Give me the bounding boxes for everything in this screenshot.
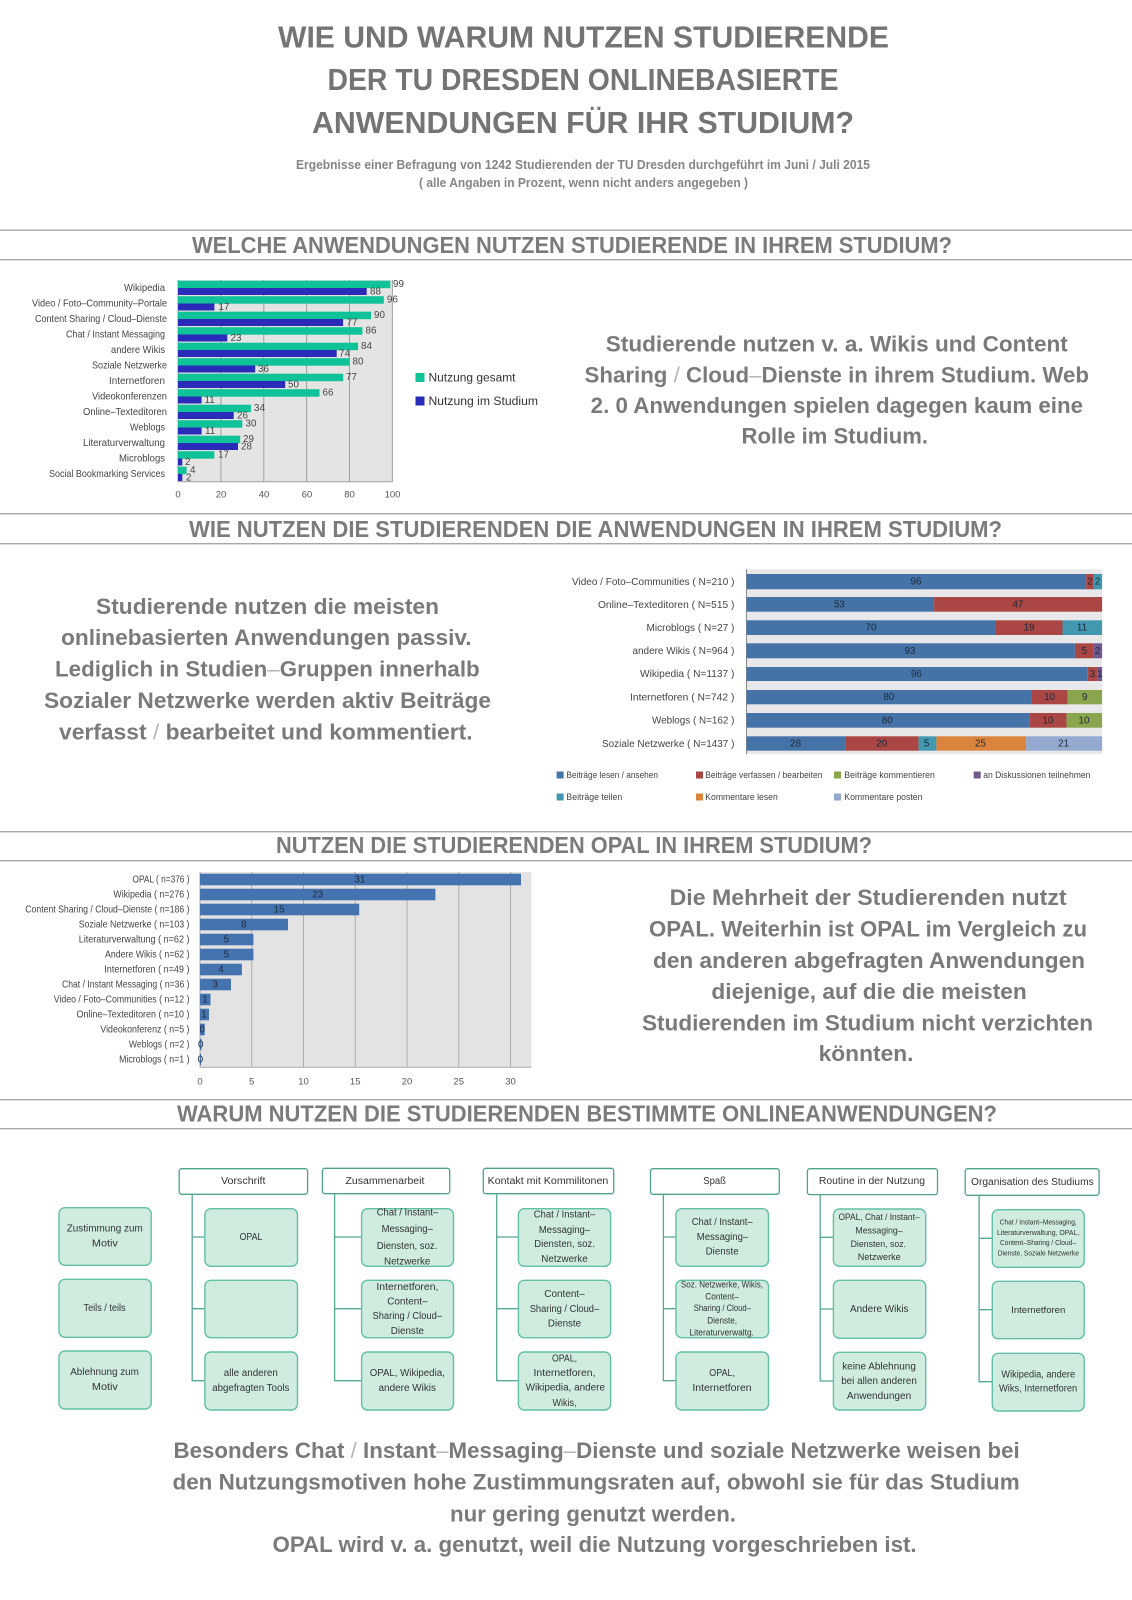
category labels: Online–Texteditoren ( N=515 ) <box>598 600 734 611</box>
bar: Soziale Netzwerke: 21 <box>1058 738 1069 750</box>
category labels: OPAL ( n=376 ) <box>132 874 190 885</box>
x axis labels: 60 <box>302 490 312 500</box>
bar: Wikipedia <box>746 667 1103 681</box>
x axis labels: 5 <box>249 1076 254 1087</box>
column: Spaß: OPAL, <box>709 1368 735 1379</box>
column: Kontakt mit Kommilitonen: Sharing / Cloud– <box>530 1304 600 1315</box>
data labels: Nutzung im Studium: 28 <box>241 442 252 452</box>
column: Routine in der Nutzung: Messaging– <box>855 1226 903 1237</box>
column: Organisation des Studiums: Dienste, Soziale Netzwerke <box>998 1248 1079 1258</box>
data labels: Nutzung gesamt: 66 <box>322 388 334 398</box>
text block: Fazit Nutzungsmotive: nur gering genutzt werden. <box>450 1501 736 1526</box>
data labels: Nutzung im Studium: 2 <box>186 472 191 484</box>
data labels: 1 <box>201 1010 207 1020</box>
category labels: Online–Texteditoren <box>83 407 167 418</box>
data labels: Nutzung gesamt: 84 <box>361 341 372 352</box>
column: Spaß: Spaß <box>703 1176 726 1187</box>
data labels: Nutzung im Studium: 2 <box>185 457 190 468</box>
bar: Internetforen: 80 <box>883 692 895 703</box>
category labels: Video / Foto–Communities ( N=210 ) <box>572 577 734 588</box>
data labels: 1 <box>202 994 208 1006</box>
row labels: Teils / teils <box>84 1303 126 1314</box>
data labels: Nutzung im Studium: 77 <box>346 318 357 328</box>
column: Kontakt mit Kommilitonen: Content– <box>544 1289 585 1300</box>
legend: Kommentare posten <box>844 792 922 802</box>
bar: Video/Foto-Communities: 2 <box>1087 577 1093 588</box>
data labels: Nutzung im Studium: 88 <box>370 286 381 298</box>
data labels: Nutzung gesamt: 29 <box>243 434 254 445</box>
bar: andere Wikis: 2 <box>1095 646 1100 657</box>
bar: Weblogs: 80 <box>882 715 893 726</box>
category labels: Wikipedia <box>124 283 165 294</box>
bar: andere Wikis: 5 <box>1082 646 1088 657</box>
bar: Weblogs: 10 <box>1079 715 1090 726</box>
bar: Soziale Netzwerke: 25 <box>975 738 986 750</box>
data labels: 0 <box>198 1054 204 1066</box>
column: Zusammenarbeit <box>322 1168 454 1410</box>
bar: andere Wikis <box>746 643 1102 658</box>
data labels: Nutzung im Studium: 17 <box>218 302 229 313</box>
text block: Fazit Nutzungsmotive: Besonders Chat / Instant–Messaging–Dienste und soziale Netzwerke weisen bei <box>174 1438 1020 1463</box>
column: Routine in der Nutzung: Anwendungen <box>847 1391 911 1402</box>
text block: Wikis und Content Sharing <box>584 332 1089 449</box>
column: Zusammenarbeit: Messaging– <box>382 1224 433 1235</box>
data labels: 5 <box>224 950 230 960</box>
column: Spaß: Messaging– <box>697 1232 749 1243</box>
category labels: Videokonferenzen <box>92 391 167 402</box>
data labels: Nutzung gesamt <box>190 279 404 476</box>
bar: Microblogs: 70 <box>866 623 877 634</box>
row labels: Motiv <box>92 1238 118 1250</box>
column: Zusammenarbeit: Diensten, soz. <box>377 1241 437 1252</box>
column: Kontakt mit Kommilitonen: Chat / Instant– <box>534 1210 596 1220</box>
data labels: Nutzung im Studium: 11 <box>204 395 215 406</box>
column: Vorschrift: Vorschrift <box>221 1176 266 1187</box>
category labels <box>572 577 734 750</box>
data labels: Nutzung gesamt: 99 <box>393 279 404 290</box>
text block: Mehrheit nutzt OPAL: Die Mehrheit der Studierenden nutzt <box>670 885 1067 910</box>
x axis labels <box>197 1076 516 1087</box>
bar: Internetforen: 9 <box>1082 692 1087 703</box>
column: Organisation des Studiums: Wikipedia, andere <box>1001 1370 1076 1380</box>
column: Organisation des Studiums: Chat / Instant–Messaging, <box>1000 1218 1077 1226</box>
text block: passive Nutzung: Studierende nutzen die meisten <box>96 594 439 619</box>
x axis labels: 80 <box>344 490 355 500</box>
bar: Video/Foto-Communities <box>746 574 1102 589</box>
data labels: Nutzung im Studium: 26 <box>237 410 248 422</box>
bar: Internetforen <box>746 690 1102 704</box>
column: Organisation des Studiums: Literaturverwaltung, OPAL, <box>997 1228 1079 1237</box>
text block: Wikis und Content Sharing: Studierende nutzen v. a. Wikis und Content <box>606 332 1068 357</box>
column: Vorschrift: alle anderen <box>224 1368 278 1379</box>
column: Kontakt mit Kommilitonen <box>483 1168 614 1410</box>
column: Kontakt mit Kommilitonen: OPAL, <box>552 1354 577 1364</box>
column: Spaß: Literaturverwaltg. <box>689 1328 754 1338</box>
data labels: 31 <box>355 874 365 886</box>
column: Routine in der Nutzung: Netzwerke <box>858 1252 901 1263</box>
legend <box>416 372 538 408</box>
column: Routine in der Nutzung: keine Ablehnung <box>842 1362 916 1372</box>
column: Organisation des Studiums: Content–Sharing / Cloud– <box>1000 1238 1076 1247</box>
column: Spaß: Dienste, <box>707 1315 737 1325</box>
column: Vorschrift: OPAL <box>240 1232 263 1243</box>
column: Zusammenarbeit: Internetforen, <box>376 1282 438 1293</box>
category labels: Microblogs ( N=27 ) <box>646 623 734 634</box>
column: Routine in der Nutzung: bei allen anderen <box>841 1376 917 1387</box>
category labels: Microblogs ( n=1 ) <box>119 1054 190 1065</box>
data labels: Nutzung im Studium: 74 <box>339 348 350 360</box>
category labels: Literaturverwaltung ( n=62 ) <box>79 934 190 945</box>
column: Kontakt mit Kommilitonen: Netzwerke <box>541 1254 588 1265</box>
column: Spaß: Dienste <box>706 1246 739 1258</box>
heading: section 2: WIE NUTZEN DIE STUDIERENDEN DIE ANWENDUNGEN IN IHREM STUDIUM? <box>189 516 1002 542</box>
heading: section 3: NUTZEN DIE STUDIERENDEN OPAL IN IHREM STUDIUM? <box>276 832 872 858</box>
title <box>278 19 889 140</box>
category labels: Content Sharing / Cloud–Dienste <box>35 314 167 325</box>
category labels: Weblogs ( N=162 ) <box>652 716 734 726</box>
data labels: Nutzung gesamt: 80 <box>352 356 364 368</box>
bar: Soziale Netzwerke: 20 <box>876 738 888 750</box>
column: Spaß: Sharing / Cloud– <box>694 1303 751 1313</box>
category labels: Microblogs <box>119 453 165 464</box>
data labels: Nutzung im Studium: 36 <box>258 364 269 375</box>
column: Organisation des Studiums <box>965 1169 1099 1411</box>
title: ANWENDUNGEN FÜR IHR STUDIUM? <box>312 105 854 140</box>
category labels <box>32 283 167 480</box>
column: Zusammenarbeit: Content– <box>387 1296 428 1308</box>
x axis labels: 30 <box>505 1076 516 1087</box>
column: Spaß <box>650 1169 779 1410</box>
text block: Mehrheit nutzt OPAL: den anderen abgefragten Anwendungen <box>653 948 1085 973</box>
bar: andere Wikis: 93 <box>905 646 916 657</box>
category labels: Social Bookmarking Services <box>49 469 165 480</box>
column: Routine in der Nutzung: Routine in der Nutzung <box>819 1176 925 1187</box>
bar: Internetforen: 10 <box>1044 692 1056 703</box>
text block: Wikis und Content Sharing: 2. 0 Anwendungen spielen dagegen kaum eine <box>591 393 1083 418</box>
legend: Beiträge verfassen / bearbeiten <box>705 770 822 780</box>
x axis labels: 100 <box>385 490 400 500</box>
category labels: Chat / Instant Messaging <box>66 329 165 340</box>
category labels: Wikipedia ( n=276 ) <box>113 889 190 900</box>
column: Kontakt mit Kommilitonen: Kontakt mit Kommilitonen <box>488 1176 608 1187</box>
bar: Video/Foto-Communities: 2 <box>1095 577 1100 588</box>
x axis labels: 20 <box>402 1076 412 1087</box>
column: Zusammenarbeit: Chat / Instant– <box>377 1208 439 1218</box>
bar: Microblogs: 11 <box>1077 623 1087 634</box>
text block: Mehrheit nutzt OPAL: könnten. <box>819 1041 914 1066</box>
data labels: Nutzung gesamt: 34 <box>254 403 265 414</box>
x axis labels: 20 <box>216 490 226 500</box>
data labels: Nutzung gesamt: 77 <box>346 372 357 383</box>
category labels: Internetforen ( N=742 ) <box>630 692 734 704</box>
legend: Kommentare lesen <box>705 792 778 802</box>
column: Kontakt mit Kommilitonen: Messaging– <box>539 1225 591 1236</box>
legend: Beiträge kommentieren <box>844 770 935 780</box>
subtitle <box>296 158 870 190</box>
legend <box>557 770 1090 802</box>
column: Zusammenarbeit: Dienste <box>391 1326 424 1337</box>
title: WIE UND WARUM NUTZEN STUDIERENDE <box>278 19 889 54</box>
data labels: 15 <box>274 904 285 916</box>
subtitle: ( alle Angaben in Prozent, wenn nicht anders angegeben ) <box>419 176 748 190</box>
column: Kontakt mit Kommilitonen: Wikipedia, andere <box>526 1382 605 1394</box>
column: Routine in der Nutzung: OPAL, Chat / Instant– <box>838 1212 920 1223</box>
column: Zusammenarbeit: Netzwerke <box>384 1256 431 1268</box>
bar: Microblogs: 19 <box>1024 623 1034 634</box>
data labels: Nutzung gesamt: 90 <box>374 310 385 321</box>
data labels: Nutzung im Studium: 23 <box>230 333 242 344</box>
data labels: 0 <box>199 1024 205 1036</box>
category labels: Wikipedia ( N=1137 ) <box>640 669 734 680</box>
legend: Beiträge lesen / ansehen <box>566 770 658 780</box>
text block: Wikis und Content Sharing: Sharing / Cloud–Dienste in ihrem Studium. Web <box>584 362 1089 387</box>
text block: Fazit Nutzungsmotive: den Nutzungsmotiven hohe Zustimmungsraten auf, obwohl sie für das Studium <box>172 1470 1020 1495</box>
column: Organisation des Studiums: Internetforen <box>1011 1305 1065 1316</box>
column: Organisation des Studiums: Organisation des Studiums <box>971 1177 1094 1188</box>
column: Spaß: Chat / Instant– <box>692 1217 753 1228</box>
column: Spaß: Content– <box>705 1291 739 1301</box>
x axis labels: 10 <box>298 1076 309 1087</box>
bar chart: Nutzung gesamt und im Studium <box>32 279 538 500</box>
bar: Soziale Netzwerke: 28 <box>790 738 802 750</box>
row labels <box>59 1208 151 1409</box>
text block: Mehrheit nutzt OPAL <box>642 885 1093 1066</box>
bar: Wikipedia: 3 <box>1090 669 1096 680</box>
legend: Beiträge teilen <box>566 792 622 802</box>
data labels: Nutzung im Studium: 11 <box>205 426 215 437</box>
category labels: Video / Foto–Community–Portale <box>32 298 167 309</box>
data labels: Nutzung gesamt: 86 <box>366 326 377 336</box>
bar: Weblogs <box>746 713 1102 728</box>
bar: Microblogs <box>746 620 1102 635</box>
data labels: Nutzung im Studium: 50 <box>288 380 299 390</box>
data labels: 8 <box>241 920 247 930</box>
category labels: Internetforen ( n=49 ) <box>104 964 190 975</box>
column: Zusammenarbeit: Zusammenarbeit <box>346 1176 425 1187</box>
x axis labels <box>175 490 400 500</box>
column: Spaß: Internetforen <box>692 1383 752 1394</box>
column: Organisation des Studiums: Wiks, Internetforen <box>999 1384 1077 1394</box>
column: Kontakt mit Kommilitonen: Internetforen, <box>534 1368 596 1379</box>
column: Spaß: Soz. Netzwerke, Wikis, <box>681 1279 763 1289</box>
column: Routine in der Nutzung: Andere Wikis <box>850 1304 908 1315</box>
column: Vorschrift <box>179 1169 308 1410</box>
category labels: Andere Wikis ( n=62 ) <box>105 949 190 960</box>
column: Kontakt mit Kommilitonen: Wikis, <box>552 1398 576 1409</box>
category labels: andere Wikis ( N=964 ) <box>632 646 734 657</box>
data labels: 23 <box>312 890 324 900</box>
bar: Online-Texteditoren <box>746 597 1102 612</box>
heading: section 1: WELCHE ANWENDUNGEN NUTZEN STUDIERENDE IN IHREM STUDIUM? <box>192 232 952 258</box>
title: DER TU DRESDEN ONLINEBASIERTE <box>328 62 838 97</box>
column: Zusammenarbeit: andere Wikis <box>378 1383 436 1394</box>
column: Routine in der Nutzung: Diensten, soz. <box>851 1239 906 1250</box>
x axis labels: 40 <box>259 490 269 500</box>
data labels: Nutzung gesamt: 4 <box>190 465 196 476</box>
category labels <box>25 874 189 1065</box>
stacked bar chart: Art der Nutzung <box>557 569 1103 802</box>
data labels: 3 <box>212 980 218 990</box>
bar: Online-Texteditoren: 47 <box>1012 599 1023 610</box>
x axis labels: 0 <box>175 490 181 500</box>
legend: Nutzung gesamt <box>428 372 516 384</box>
bar: Video/Foto-Communities: 96 <box>911 577 922 588</box>
column: Zusammenarbeit: OPAL, Wikipedia, <box>370 1368 445 1379</box>
subtitle: Ergebnisse einer Befragung von 1242 Studierenden der TU Dresden durchgeführt im Juni / Juli 2015 <box>296 158 870 172</box>
category labels: Online–Texteditoren ( n=10 ) <box>76 1009 190 1020</box>
category labels: Soziale Netzwerke ( n=103 ) <box>79 919 190 930</box>
category labels: andere Wikis <box>111 345 165 356</box>
category labels: Content Sharing / Cloud–Dienste ( n=186 ) <box>25 904 189 915</box>
x axis labels: 15 <box>350 1076 360 1087</box>
bar: Soziale Netzwerke <box>746 736 1102 751</box>
bar: Online-Texteditoren: 53 <box>834 599 845 610</box>
text block: Fazit Nutzungsmotive <box>172 1438 1020 1557</box>
x axis labels: 0 <box>197 1076 203 1087</box>
data labels: Nutzung gesamt: 30 <box>246 418 257 430</box>
category labels: Literaturverwaltung <box>83 438 165 449</box>
diagram: Nutzungsmotive <box>59 1168 1099 1411</box>
category labels: Internetforen <box>109 376 165 387</box>
column: Routine in der Nutzung <box>807 1169 938 1410</box>
row labels: Ablehnung zum <box>70 1367 139 1378</box>
data labels: Nutzung gesamt: 96 <box>387 294 398 306</box>
column: Kontakt mit Kommilitonen: Dienste <box>548 1318 582 1330</box>
category labels: Soziale Netzwerke ( N=1437 ) <box>602 739 734 750</box>
x axis labels: 25 <box>453 1076 464 1087</box>
text block: passive Nutzung: verfasst / bearbeitet und kommentiert. <box>59 720 473 744</box>
legend: Nutzung im Studium <box>428 396 538 408</box>
bar: Wikipedia: 96 <box>911 669 922 680</box>
category labels: Chat / Instant Messaging ( n=36 ) <box>62 979 190 990</box>
column: Vorschrift: abgefragten Tools <box>212 1383 289 1394</box>
row labels: Motiv <box>92 1382 118 1393</box>
data labels: 4 <box>218 964 224 976</box>
category labels: Weblogs ( n=2 ) <box>129 1039 190 1050</box>
column: Zusammenarbeit: Sharing / Cloud– <box>372 1311 442 1322</box>
category labels: Videokonferenz ( n=5 ) <box>100 1024 190 1035</box>
data labels <box>198 874 365 1066</box>
category labels: Weblogs <box>130 422 165 433</box>
bar chart: OPAL <box>25 872 531 1087</box>
data labels: Nutzung im Studium <box>185 286 381 484</box>
text block: Fazit Nutzungsmotive: OPAL wird v. a. genutzt, weil die Nutzung vorgeschrieben ist. <box>272 1532 917 1557</box>
text block: passive Nutzung: Sozialer Netzwerke werden aktiv Beiträge <box>44 688 491 713</box>
text block: Mehrheit nutzt OPAL: Studierenden im Studium nicht verzichten <box>642 1010 1093 1035</box>
data labels: Nutzung gesamt: 17 <box>218 450 229 460</box>
text block: passive Nutzung: Lediglich in Studien–Gruppen innerhalb <box>55 656 480 681</box>
text block: passive Nutzung <box>44 594 491 744</box>
bar: Wikipedia: 1 <box>1097 669 1103 680</box>
bar: Weblogs: 10 <box>1043 715 1054 726</box>
legend: an Diskussionen teilnehmen <box>983 770 1090 780</box>
bar: Soziale Netzwerke: 5 <box>924 738 930 750</box>
row labels: Zustimmung zum <box>67 1224 143 1234</box>
text block: Wikis und Content Sharing: Rolle im Studium. <box>742 424 928 449</box>
category labels: Soziale Netzwerke <box>92 360 167 371</box>
text block: Mehrheit nutzt OPAL: diejenige, auf die die meisten <box>711 979 1027 1004</box>
column: Kontakt mit Kommilitonen: Diensten, soz. <box>534 1239 595 1250</box>
text block: Mehrheit nutzt OPAL: OPAL. Weiterhin ist OPAL im Vergleich zu <box>649 916 1087 942</box>
heading: section 4: WARUM NUTZEN DIE STUDIERENDEN BESTIMMTE ONLINEANWENDUNGEN? <box>177 1100 997 1126</box>
category labels: Video / Foto–Communities ( n=12 ) <box>54 994 189 1005</box>
data labels: 5 <box>224 934 230 946</box>
text block: passive Nutzung: onlinebasierten Anwendungen passiv. <box>61 625 472 650</box>
data labels: 0 <box>198 1040 204 1050</box>
